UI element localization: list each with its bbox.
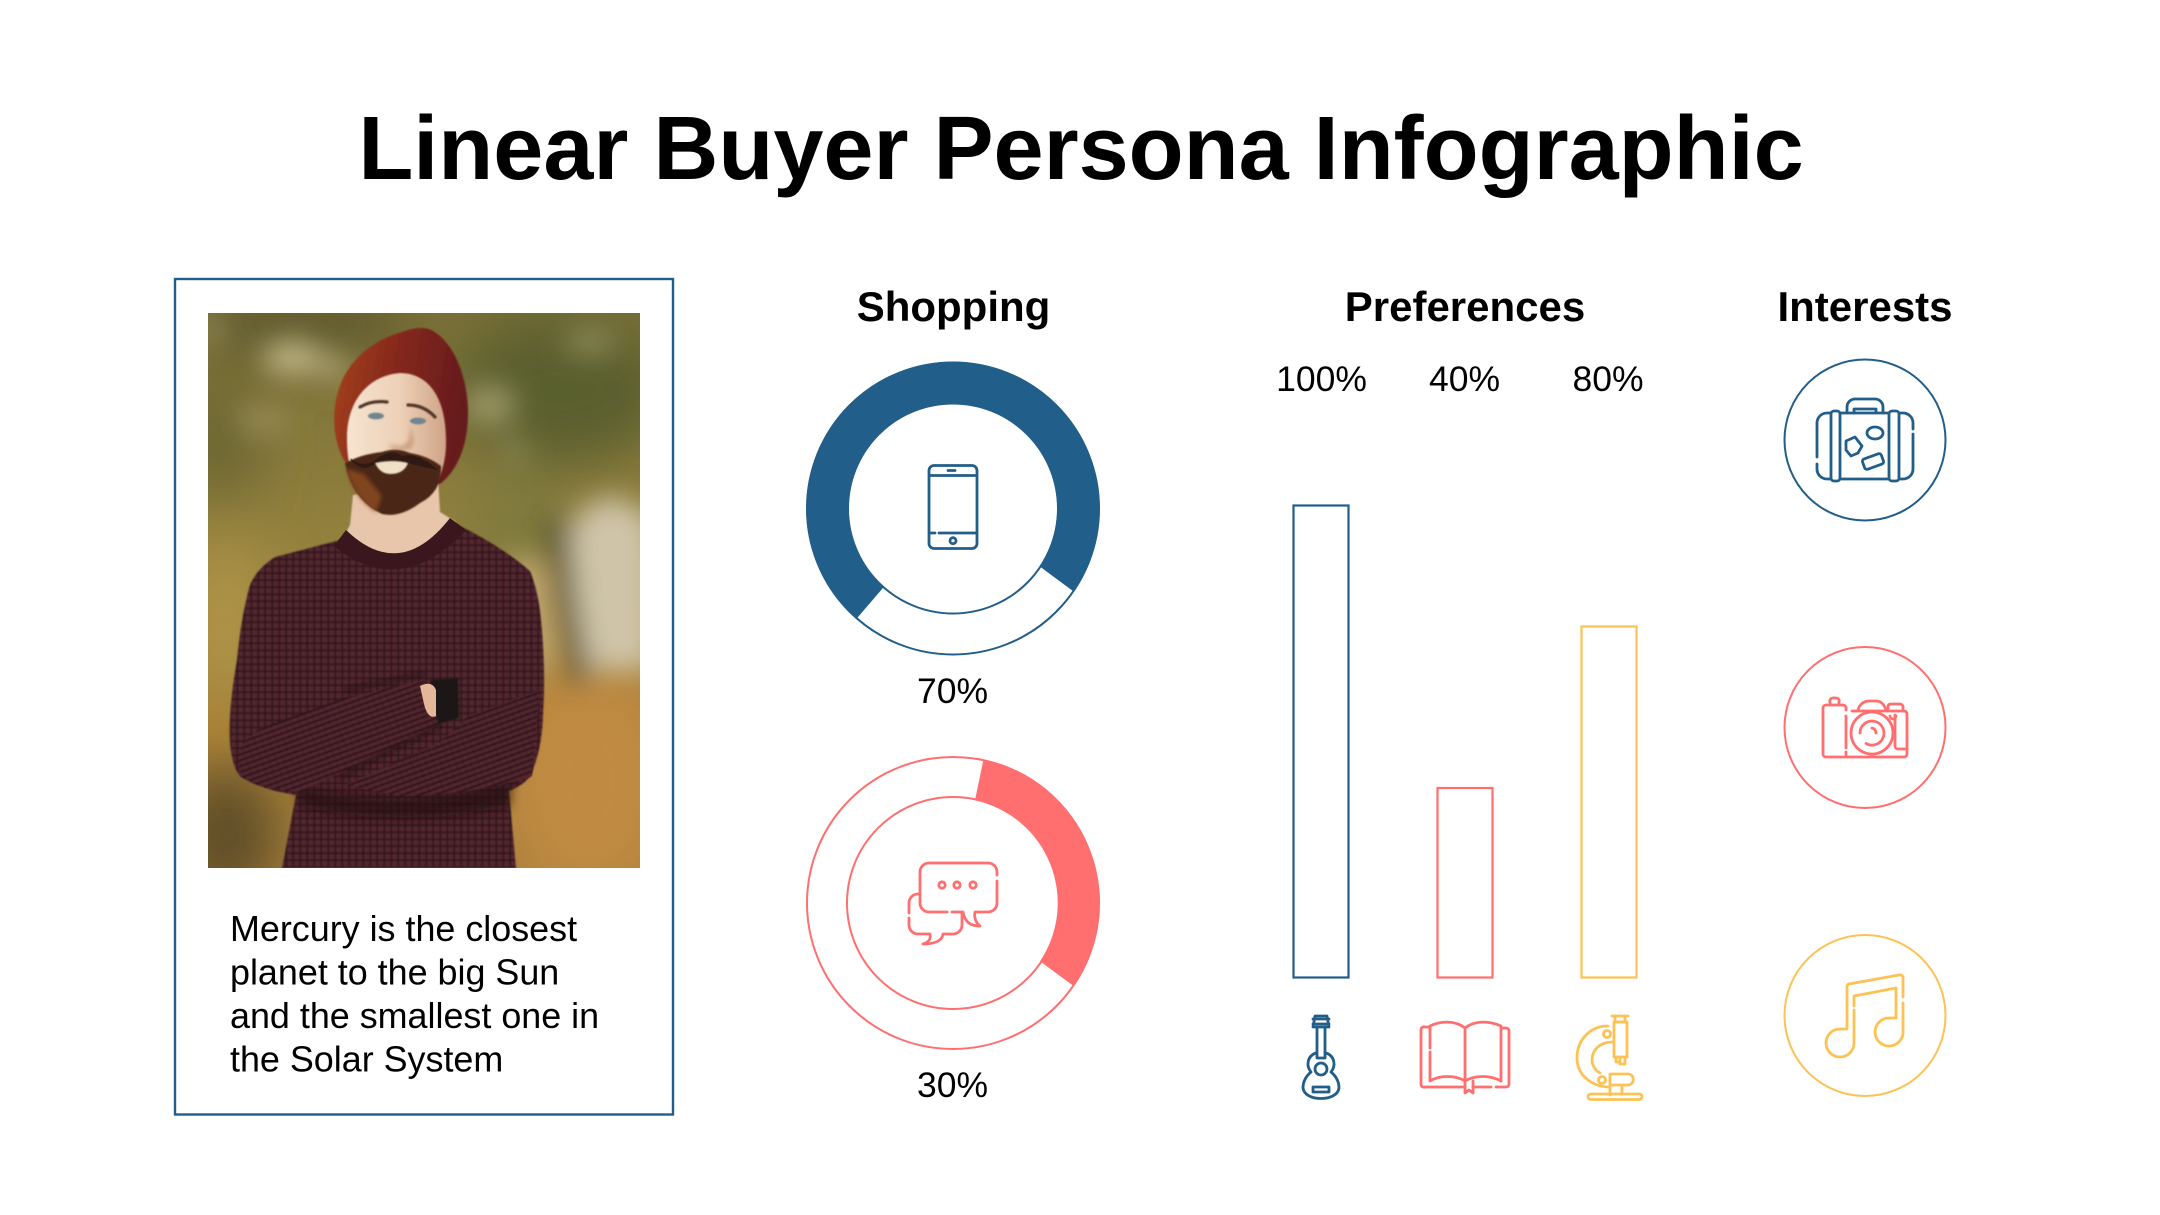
label: 40%: 40%: [1429, 359, 1500, 399]
shaded fold below crossed arms: [296, 780, 512, 818]
beard: [345, 450, 441, 515]
donut chart: 70%: [806, 362, 1100, 654]
panel: preferences: [1276, 283, 1644, 1100]
icon: smartphone: [929, 466, 977, 548]
panel: interests: [1777, 283, 1953, 1096]
icon: chat bubbles: [909, 863, 997, 944]
arm shading: [340, 674, 440, 778]
bar: 100%: [1294, 506, 1348, 978]
hand: [420, 684, 436, 717]
icon: microscope: [1577, 1016, 1642, 1100]
lower forearm: [345, 690, 540, 796]
heading: shopping: Shopping: [857, 283, 1050, 330]
icon circle: suitcase: [1784, 360, 1946, 520]
label: 80%: 80%: [1572, 359, 1644, 399]
face: [346, 372, 447, 478]
description text: the Solar System: [230, 1040, 503, 1080]
sweater silhouette: [230, 523, 544, 868]
eyes: [368, 413, 426, 424]
nose shadow: [388, 425, 414, 451]
description text: and the smallest one in: [230, 996, 599, 1036]
panel: shopping: [806, 283, 1100, 1105]
bar: 80%: [1582, 626, 1636, 978]
icon circle: music notes: [1784, 935, 1946, 1096]
photo: smiling bearded man in a red beanie and knit sweater: [208, 313, 640, 868]
icon circle: camera: [1784, 647, 1946, 808]
upper forearm: [238, 680, 440, 792]
heading: interests: Interests: [1777, 283, 1953, 330]
title: Linear Buyer Persona Infographic: [358, 99, 1804, 199]
label: 100%: 100%: [1276, 359, 1367, 399]
description text: Mercury is the closest: [230, 909, 577, 949]
moustache: [350, 452, 438, 470]
sweater collar: [334, 518, 466, 570]
donut chart: 30%: [807, 757, 1100, 1049]
bar: 40%: [1438, 788, 1492, 978]
panel: persona card: [170, 279, 675, 1114]
smile: [375, 461, 408, 474]
cuff: [430, 678, 459, 724]
neck: [346, 484, 456, 554]
card border: [175, 279, 673, 1114]
label: 30%: 30%: [917, 1065, 988, 1105]
heading: preferences: Preferences: [1345, 283, 1585, 330]
label: 70%: 70%: [917, 671, 988, 711]
beard highlight: [346, 468, 382, 512]
eyebrows: [360, 402, 435, 417]
hat: [334, 328, 468, 484]
icon: open book: [1421, 1022, 1509, 1093]
description text: planet to the big Sun: [230, 952, 559, 992]
icon: ukulele: [1303, 1016, 1339, 1098]
